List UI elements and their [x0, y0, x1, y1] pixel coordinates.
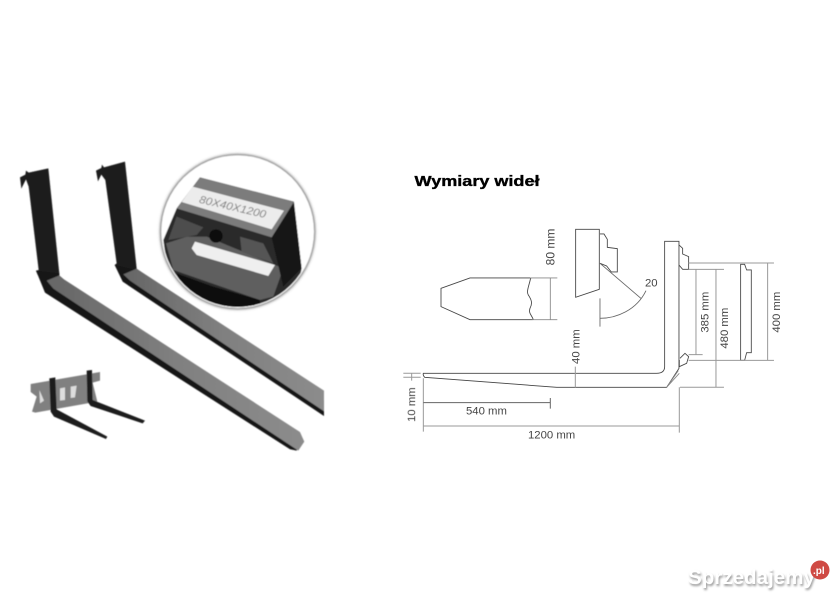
detail lens: fork label — [160, 154, 315, 313]
watermark: Sprzedajemy.pl: .pl — [813, 566, 825, 577]
dimension labels: 400 mm — [771, 292, 783, 333]
watermark: Sprzedajemy.pl: Sprzedajemy — [689, 569, 817, 591]
fork: right — [96, 162, 324, 416]
photo panel: forks — [20, 154, 324, 451]
detail lens: fork label: 80X40X1200 — [198, 194, 267, 221]
fork: inset left — [49, 377, 107, 439]
drawing: hook profile with angle: 20 — [645, 278, 658, 290]
dimension labels: 40 mm — [570, 329, 582, 364]
dimension labels: 10 mm — [406, 387, 418, 422]
drawing: carriage bar profile — [741, 264, 751, 360]
dimension labels — [406, 292, 783, 442]
watermark: Sprzedajemy.pl — [688, 560, 830, 591]
drawing: hook profile with angle — [576, 229, 658, 327]
drawing: blade cross section: 80 mm — [543, 229, 557, 265]
dimension labels: 480 mm — [719, 308, 731, 349]
dimension labels: 1200 mm — [528, 430, 575, 442]
technical drawing: fork dimensions — [403, 229, 783, 442]
dimension labels: 540 mm — [466, 406, 507, 418]
infographic canvas — [19, 152, 830, 592]
drawing: fork side profile — [423, 241, 689, 387]
heading: Wymiary wideł — [414, 174, 540, 190]
fork: inset right — [87, 370, 145, 423]
fork: left — [20, 168, 304, 451]
photo inset: fork carriage — [31, 370, 145, 439]
watermark: Sprzedajemy.pl: Sprzedajemy — [688, 567, 816, 589]
dimension labels: 385 mm — [699, 292, 711, 333]
drawing: blade cross section — [441, 229, 557, 320]
dimension lines — [403, 263, 774, 433]
